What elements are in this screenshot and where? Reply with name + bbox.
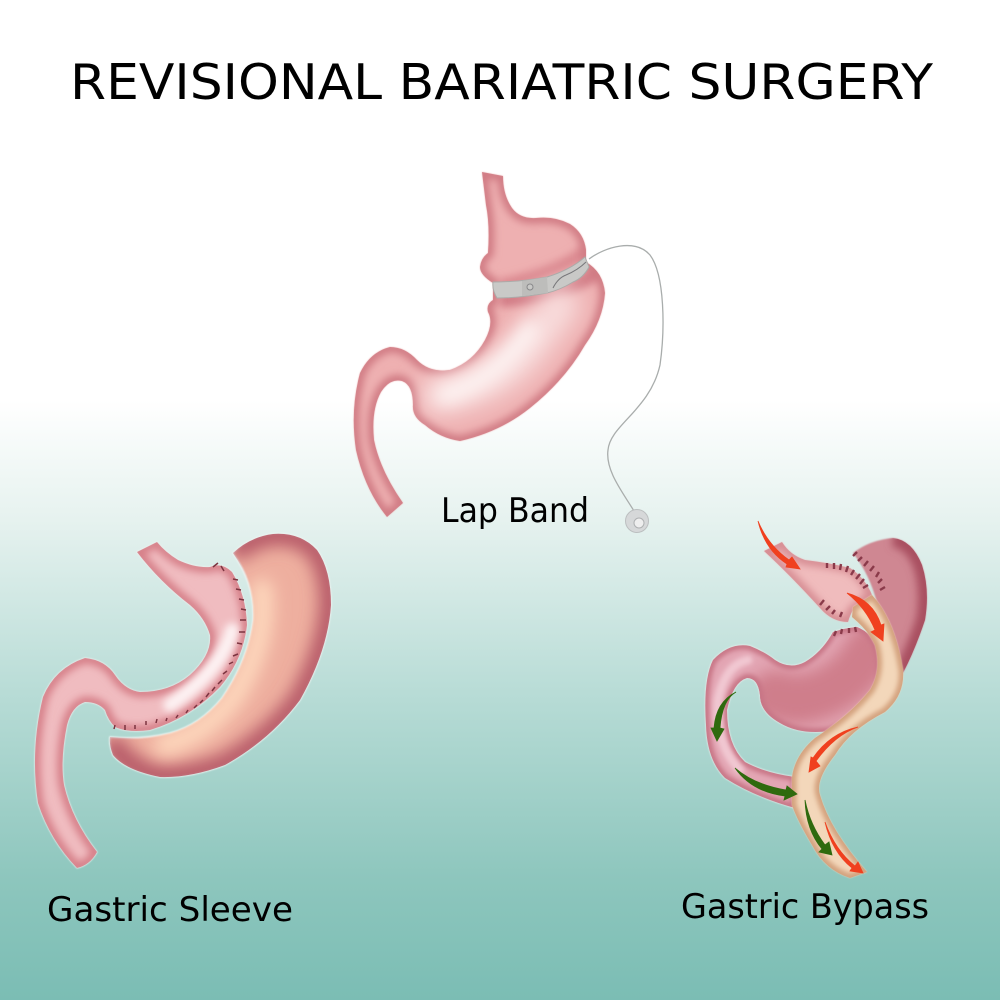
arrow: food into common channel xyxy=(825,822,863,873)
arrow: food down roux limb xyxy=(847,593,884,641)
panel: lap band xyxy=(354,172,663,532)
arrow: food down mid limb xyxy=(809,727,858,772)
arrow: green toward junction xyxy=(735,768,797,800)
arrow: green into common channel xyxy=(805,800,832,855)
removed stomach portion xyxy=(110,534,331,777)
stomach: lap band xyxy=(354,172,605,517)
roux limb xyxy=(792,595,903,878)
staple line xyxy=(114,563,246,730)
bypassed stomach remnant xyxy=(853,538,927,673)
arrow: food into pouch xyxy=(758,521,800,569)
staple lines xyxy=(820,552,885,636)
sleeve stomach and intestine xyxy=(35,542,247,868)
title: REVISIONAL BARIATRIC SURGERY xyxy=(70,54,934,111)
label: lap band: Lap Band xyxy=(441,491,589,531)
duodenum and biliary limb xyxy=(705,627,880,808)
label: gastric bypass: Gastric Bypass xyxy=(681,887,929,927)
tubing and access port xyxy=(589,246,663,532)
gastric pouch xyxy=(764,542,872,622)
label: gastric sleeve: Gastric Sleeve xyxy=(47,890,293,930)
panel: gastric sleeve xyxy=(35,534,331,930)
gastric band xyxy=(493,257,589,298)
panel: gastric bypass xyxy=(681,521,929,927)
arrow: green down biliary limb xyxy=(711,692,736,741)
